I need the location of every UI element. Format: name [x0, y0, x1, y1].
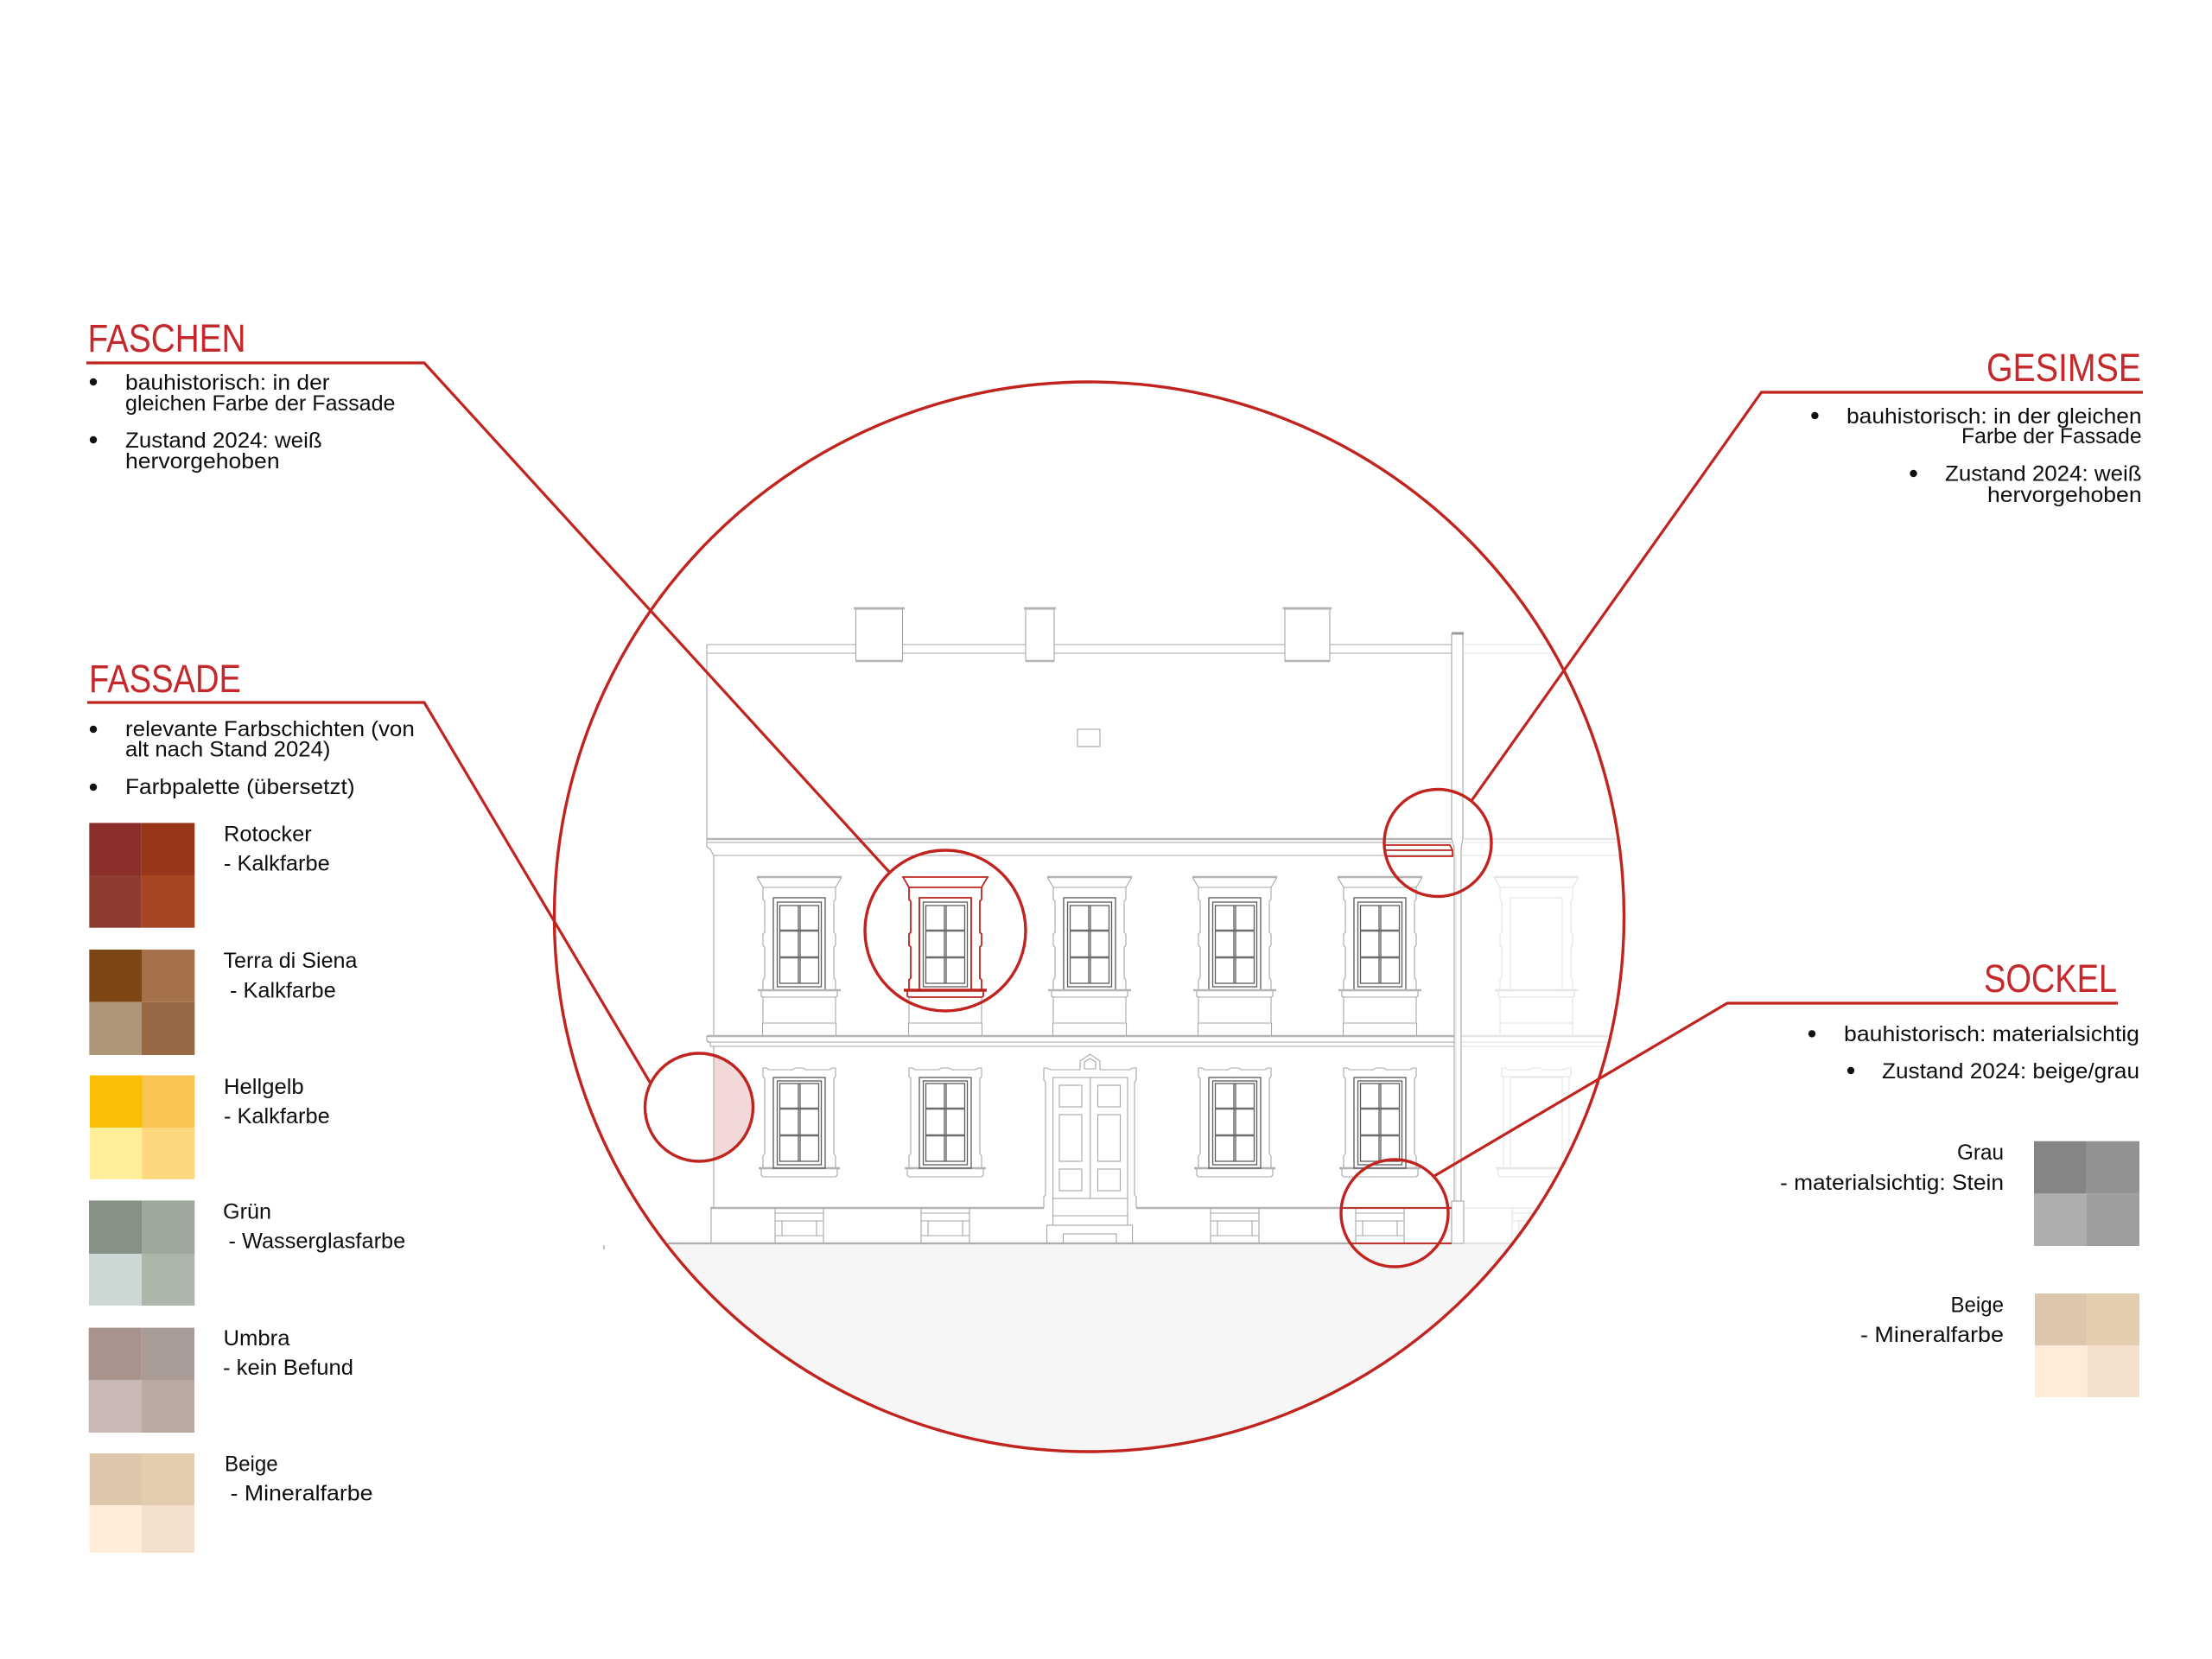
detail circle: fassade — [645, 1053, 753, 1161]
bullet list: gesimse: hervorgehoben — [1987, 483, 2142, 507]
label: hellgelb: Hellgelb — [224, 1075, 304, 1099]
swatch: gruen — [89, 1200, 194, 1306]
bullet list: gesimse: bauhistorisch: in der gleichen — [1847, 404, 2142, 429]
bullet list: faschen: hervorgehoben — [125, 449, 280, 474]
big circle — [555, 382, 1624, 1452]
heading: sockel: SOCKEL — [1984, 957, 2117, 1001]
red highlighted plinth — [1341, 1208, 1452, 1243]
label: beige — [225, 1452, 373, 1505]
roof and chimneys — [707, 608, 1555, 839]
building elevation drawing — [707, 608, 1624, 1243]
bullet list: gesimse: Farbe der Fassade — [1961, 424, 2142, 448]
panel: fassade — [89, 657, 415, 1553]
bullet list: sockel: bauhistorisch: materialsichtig — [1844, 1022, 2139, 1046]
label: hellgelb: - Kalkfarbe — [224, 1104, 330, 1128]
label: gruen — [223, 1199, 405, 1253]
label: grau — [1780, 1141, 2004, 1195]
bullet list: fassade: Farbpalette (übersetzt) — [125, 775, 355, 799]
detail circle: gesimse — [1384, 790, 1491, 897]
downpipe — [1452, 633, 1464, 1243]
swatch: umbra — [89, 1328, 194, 1433]
swatch: hellgelb — [90, 1075, 194, 1179]
label: hellgelb — [224, 1075, 330, 1128]
red highlighted window surround — [903, 877, 988, 997]
swatch: beige sockel — [2035, 1294, 2139, 1397]
label: beige: Beige — [225, 1452, 278, 1476]
label: beige: - Mineralfarbe — [230, 1481, 373, 1505]
label: terra di siena: Terra di Siena — [223, 949, 358, 973]
detail circle: faschen — [865, 850, 1026, 1011]
bullet list: faschen — [90, 371, 396, 474]
bullet list: gesimse — [1811, 404, 2142, 507]
faded right bay windows — [1494, 877, 1579, 1177]
label: beige sockel: Beige — [1951, 1294, 2004, 1318]
ground floor windows — [759, 1068, 1421, 1177]
label: gruen: - Wasserglasfarbe — [228, 1229, 405, 1253]
label: umbra: - kein Befund — [223, 1356, 353, 1380]
upper floor windows — [757, 877, 1422, 1036]
bullet list: faschen: bauhistorisch: in der — [125, 371, 330, 395]
label: terra di siena: - Kalkfarbe — [230, 978, 336, 1002]
bullet list: faschen: gleichen Farbe der Fassade — [125, 391, 396, 416]
bullet list: sockel: Zustand 2024: beige/grau — [1882, 1059, 2139, 1084]
leader: gesimse — [1472, 392, 2143, 800]
bullet list: gesimse: Zustand 2024: weiß — [1945, 462, 2142, 486]
panel: gesimse — [1811, 346, 2142, 507]
ground line — [668, 1243, 1452, 1244]
label: beige sockel: - Mineralfarbe — [1860, 1323, 2004, 1347]
bullet list: faschen: Zustand 2024: weiß — [125, 429, 322, 453]
red highlighted cornice — [1385, 845, 1452, 856]
entrance door — [1044, 1054, 1136, 1243]
label: grau: - materialsichtig: Stein — [1780, 1171, 2004, 1195]
label: terra di siena — [223, 949, 358, 1002]
bullet list: sockel — [1808, 1022, 2139, 1084]
swatch: beige — [90, 1453, 194, 1553]
label: gruen: Grün — [223, 1199, 271, 1224]
heading: fassade: FASSADE — [89, 657, 241, 701]
ground inside circle — [669, 1244, 1510, 1450]
swatch: terra di siena — [89, 950, 194, 1055]
label: umbra: Umbra — [223, 1326, 290, 1351]
facade highlight fill — [714, 1058, 752, 1158]
bullet list: fassade: relevante Farbschichten (von — [125, 717, 415, 741]
small tick left of circle — [603, 1245, 605, 1249]
bullet list: fassade — [90, 717, 415, 799]
lower cornice — [707, 1036, 1624, 1208]
leader: sockel — [1434, 1003, 2118, 1176]
heading: faschen: FASCHEN — [88, 316, 245, 360]
label: rotocker: Rotocker — [224, 823, 312, 847]
swatch: rotocker — [89, 823, 194, 928]
label: rotocker: - Kalkfarbe — [224, 852, 330, 876]
label: grau: Grau — [1957, 1141, 2004, 1165]
panel: faschen — [88, 316, 396, 474]
label: beige sockel — [1860, 1294, 2004, 1347]
label: umbra — [223, 1326, 353, 1380]
bullet list: fassade: alt nach Stand 2024) — [125, 738, 330, 762]
swatch: grau — [2034, 1141, 2139, 1246]
label: rotocker — [224, 823, 330, 876]
detail circle: sockel — [1341, 1160, 1448, 1267]
leader: faschen — [86, 363, 889, 872]
plinth and basement windows — [710, 1208, 1607, 1243]
panel: sockel — [1780, 957, 2139, 1397]
leader: fassade — [87, 702, 651, 1084]
heading: gesimse: GESIMSE — [1986, 346, 2141, 390]
upper cornice — [707, 839, 1624, 1036]
